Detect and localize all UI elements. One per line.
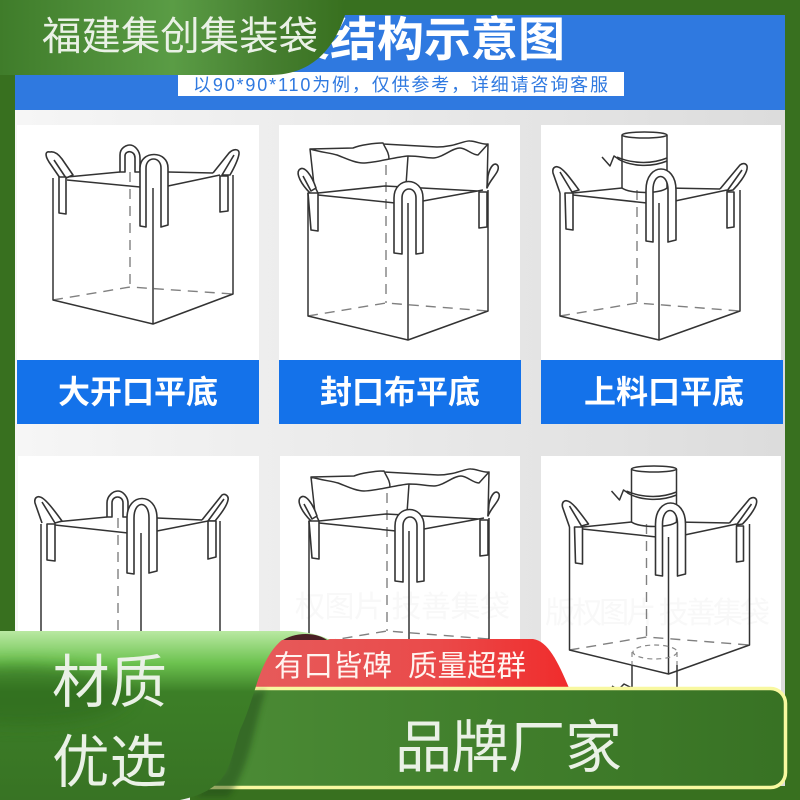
panel: lower right bag	[541, 456, 781, 696]
bag: sealed cloth top flat bottom	[298, 141, 498, 340]
brand box	[190, 688, 786, 788]
bag: open top flat bottom	[46, 145, 239, 324]
brand name: 福建集创集装袋	[42, 15, 318, 59]
banner text: 质量超群	[408, 650, 526, 683]
banner text: 有口皆碑	[274, 650, 392, 683]
ribbon shadow	[195, 690, 266, 797]
panel: 封口布平底	[279, 125, 521, 424]
top-left brand tab	[0, 0, 345, 75]
red banner	[240, 639, 569, 688]
ribbon left shading	[0, 665, 130, 725]
dark curl	[283, 634, 327, 640]
label	[541, 360, 783, 424]
panel: 大开口平底	[17, 125, 259, 424]
bag: top filling spout flat bottom	[553, 132, 747, 340]
watermark: 版权图片 技善集袋	[545, 597, 770, 630]
blue title band	[15, 13, 785, 110]
bottom strip	[190, 786, 800, 800]
label: 封口布平底	[320, 374, 480, 410]
panel: lower middle bag	[280, 456, 520, 668]
bag: open top	[35, 491, 228, 650]
subtitle bar: 以90*90*110为例，仅供参考，详细请咨询客服	[193, 75, 608, 95]
label	[279, 360, 521, 424]
green ribbon	[0, 631, 330, 800]
panel: lower left bag	[18, 456, 259, 656]
label: 大开口平底	[58, 374, 218, 410]
ribbon text: 材质: 材质	[52, 651, 167, 715]
brand text: 品牌厂家	[395, 716, 622, 780]
label	[17, 360, 259, 424]
title: 袋结构示意图	[283, 13, 565, 66]
watermark: 权图片 技善集袋	[295, 591, 510, 624]
bag: top spout and bottom discharge spout	[562, 466, 757, 674]
label: 上料口平底	[584, 374, 744, 410]
ribbon text: 优选: 优选	[52, 731, 167, 795]
panel: 上料口平底	[541, 125, 783, 424]
bottom spout	[612, 645, 677, 690]
bag: sealed cloth top	[299, 469, 499, 668]
